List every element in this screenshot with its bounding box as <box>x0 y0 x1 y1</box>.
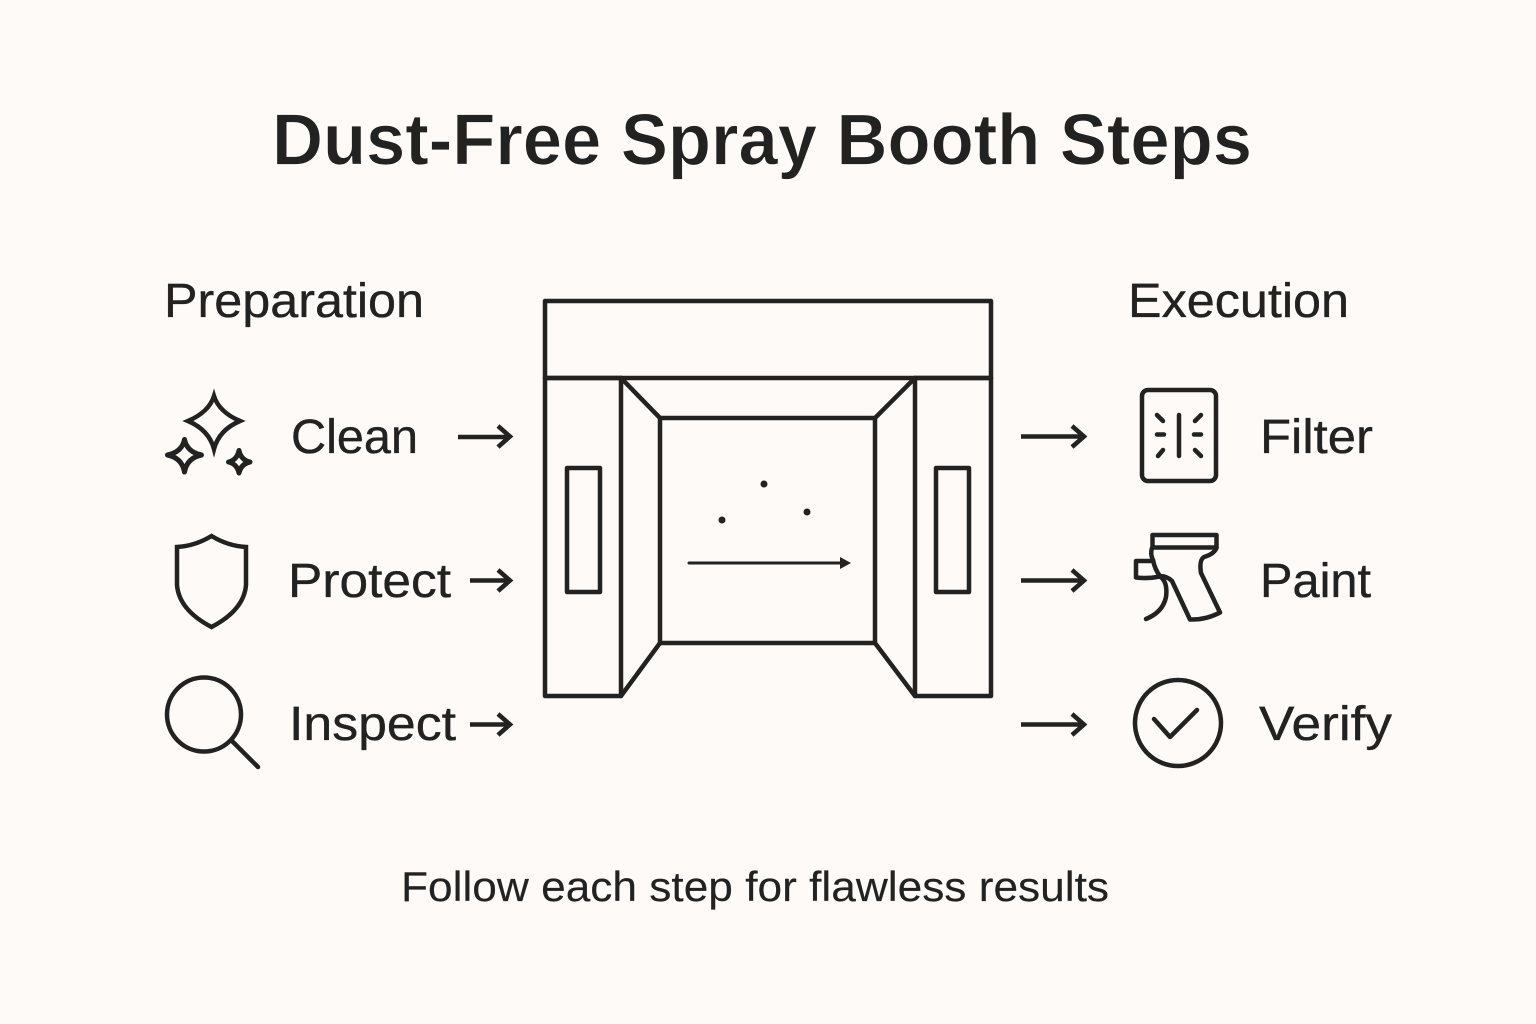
booth canopy <box>545 301 991 378</box>
heading: preparation: Preparation <box>164 275 424 328</box>
label: filter: Filter <box>1260 411 1373 464</box>
title: Dust-Free Spray Booth Steps <box>272 100 1252 180</box>
label: verify: Verify <box>1259 698 1392 751</box>
label: protect: Protect <box>288 555 451 608</box>
label: clean: Clean <box>291 411 418 464</box>
booth right column <box>915 378 991 696</box>
arrow: inspect to booth <box>470 714 510 735</box>
arrow: booth to filter <box>1021 426 1084 447</box>
booth diagram <box>545 301 991 696</box>
arrow: protect to booth <box>470 570 510 591</box>
icon: magnifier <box>167 678 258 767</box>
icon: shield <box>177 536 246 627</box>
arrow: clean to booth <box>458 426 510 447</box>
booth inner chamber <box>660 418 875 643</box>
arrow: booth to verify <box>1021 714 1084 735</box>
heading: execution: Execution <box>1128 275 1349 328</box>
icon: filter <box>1142 390 1216 481</box>
booth perspective lines <box>621 378 915 696</box>
dust particles <box>718 480 810 524</box>
arrow: booth to paint <box>1021 570 1084 591</box>
footer caption: Follow each step for flawless results <box>401 863 1109 910</box>
airflow arrow <box>689 557 851 569</box>
left vent <box>567 468 600 592</box>
label: inspect: Inspect <box>289 698 456 751</box>
icon: spray gun <box>1136 535 1220 620</box>
icon: check circle <box>1135 680 1221 766</box>
label: paint: Paint <box>1260 555 1371 608</box>
booth left column <box>545 378 621 696</box>
icon: sparkles <box>168 396 250 473</box>
right vent <box>936 468 969 592</box>
